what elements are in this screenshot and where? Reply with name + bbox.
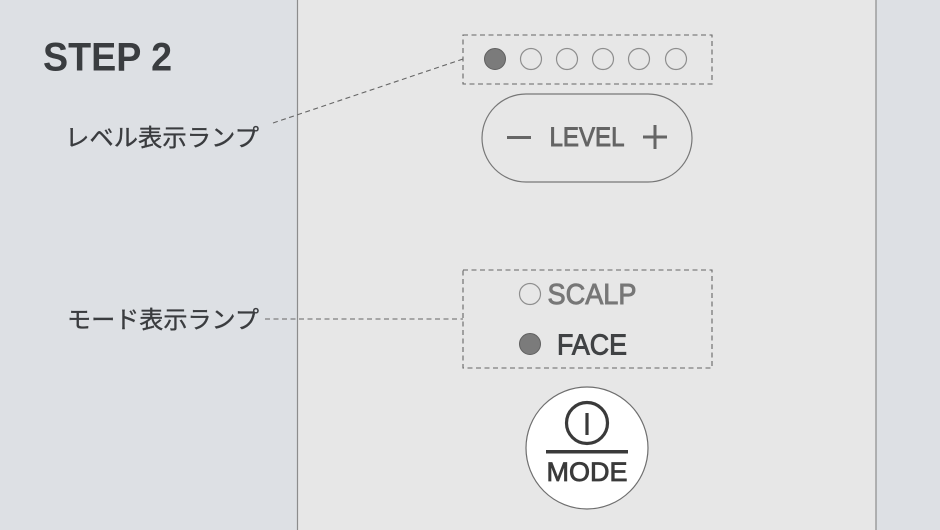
callout box: level lamps [463,35,712,84]
button: level control [482,94,692,182]
leader line: mode lamp [265,318,463,320]
icon: plus [643,125,667,149]
text: MODE: MODE [546,457,628,487]
leader line: level lamp [273,59,463,123]
lamp: scalp off [520,284,540,304]
lamp: level 3 [556,48,578,70]
icon: power [566,402,608,444]
callout box: mode lamps [463,270,712,368]
lamp: level 4 [592,48,614,70]
lamp: level 1 lit [484,48,506,70]
lamp: face lit [520,334,540,354]
lamp: level 2 [520,48,542,70]
button: mode / power [526,387,648,509]
icon: minus [507,136,531,139]
divider bar [546,450,628,454]
text: LEVEL: LEVEL [550,122,624,152]
panel: device control surface [298,0,876,530]
heading: STEP 2: STEP 2 [43,36,172,80]
lamp: level 5 [628,48,650,70]
label: mode indicator lamp: モード表示ランプ [67,307,259,334]
lamp: level 6 [666,48,686,70]
text: SCALP: SCALP [548,279,636,311]
label: level indicator lamp: レベル表示ランプ [65,125,259,152]
text: FACE: FACE [557,330,627,362]
